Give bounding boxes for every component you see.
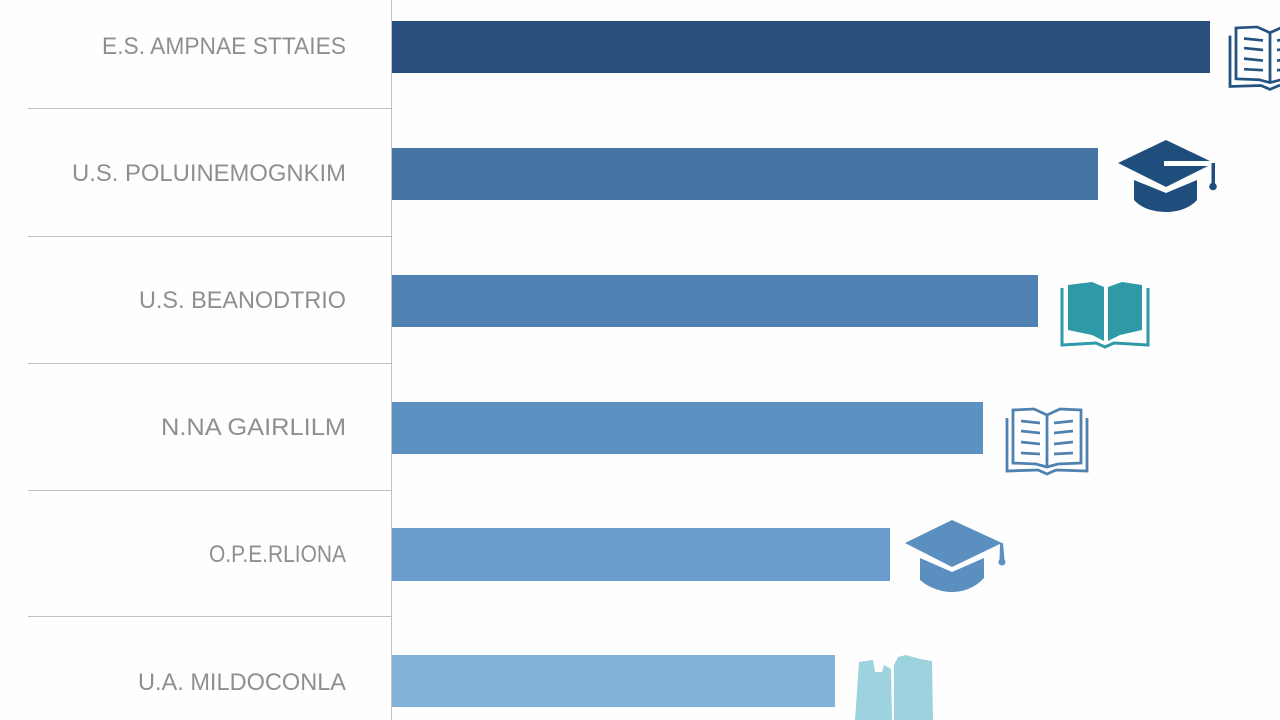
row 6 bar	[392, 655, 835, 707]
row 2 bar	[392, 148, 1098, 200]
row 6 label: U.A. MILDOCONLA	[138, 669, 346, 696]
row 5 bar	[392, 528, 890, 581]
row 1 bar	[392, 21, 1210, 73]
icon: graduation cap, navy	[1118, 140, 1217, 212]
row 3 label: U.S. BEANODTRIO	[139, 287, 346, 314]
icon: outlined book, mid blue	[1007, 409, 1087, 474]
row 2 label: U.S. POLUINEMOGNKIM	[72, 160, 346, 187]
row 3 bar	[392, 275, 1038, 327]
row 4 bar	[392, 402, 983, 454]
icon: filled book, teal	[1062, 282, 1148, 347]
icon: graduation cap, mid blue	[905, 520, 1006, 592]
icon: cropped book, pale teal	[855, 655, 933, 720]
row 1 label: E.S. AMPNAE STTAIES	[102, 33, 346, 60]
icon: outlined book, dark navy	[1230, 27, 1280, 89]
row 5 label: O.P.E.RLIONA	[209, 541, 346, 568]
row 4 label: N.NA GAIRLILM	[161, 414, 346, 441]
